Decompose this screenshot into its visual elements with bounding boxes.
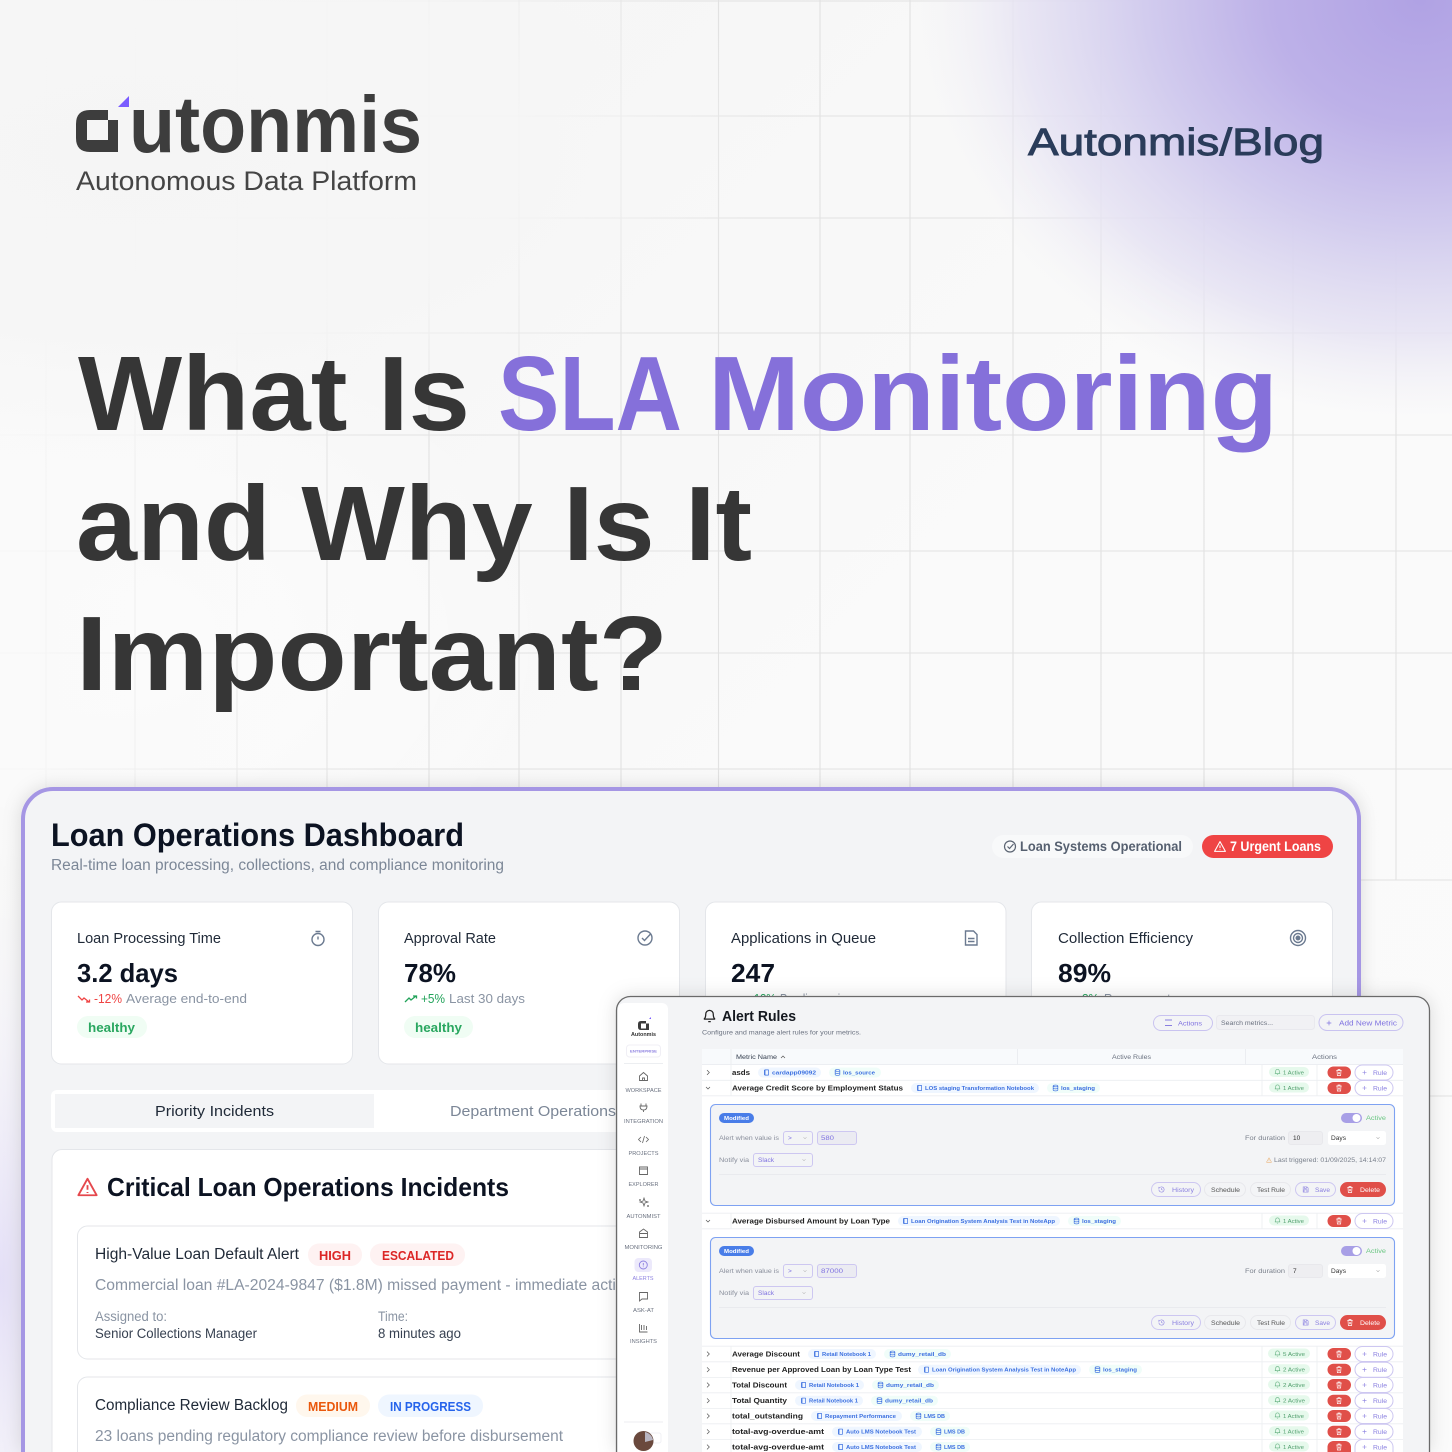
enterprise badge: ENTERPRISE <box>630 1050 658 1054</box>
row: average discount: dumy_retail_db <box>898 1352 947 1358</box>
row: average discount: 5 Active <box>1283 1352 1305 1358</box>
row: revenue per approved loan <box>702 1362 1403 1378</box>
title: Monitoring <box>708 335 1278 453</box>
rule editor: credit score: Active <box>1366 1115 1386 1122</box>
row: total avg overdue amount duplicate: total-avg-overdue-amt <box>732 1442 825 1452</box>
row: total outstanding: 1 Active <box>1283 1414 1304 1420</box>
enterprise badge <box>626 1045 660 1057</box>
rule editor: disbursed amount: Days <box>1331 1268 1347 1275</box>
nav: insights: INSIGHTS <box>630 1339 658 1345</box>
row: total outstanding: Repayment Performance <box>825 1414 896 1420</box>
row: total avg overdue amount: Rule <box>1373 1429 1387 1436</box>
KPI card: loan processing time: Average end-to-end <box>126 991 247 1006</box>
nav: workspace <box>626 1072 662 1094</box>
icon: logo mark <box>76 96 129 152</box>
icon: target <box>1290 930 1306 946</box>
KPI card: collection efficiency: 8% <box>1082 991 1099 1006</box>
nav: integration <box>624 1104 663 1125</box>
incident: high-value loan default: HIGH <box>319 1248 351 1263</box>
row: total avg overdue amount: LMS DB <box>944 1430 965 1436</box>
KPI card: approval rate: Approval Rate <box>404 930 496 947</box>
row: asds: los_source <box>843 1070 875 1076</box>
incident: high-value loan default: Time: <box>378 1309 408 1324</box>
rule editor: credit score: Test Rule <box>1257 1187 1285 1194</box>
nav: ask-at <box>633 1292 655 1314</box>
nav: integration: INTEGRATION <box>624 1119 663 1125</box>
add new metric button <box>1319 1014 1403 1030</box>
incident: compliance review backlog: Compliance Review Backlog <box>95 1397 288 1414</box>
row: revenue per approved loan: los_staging <box>1103 1368 1138 1374</box>
dashboard heading: Loan Operations Dashboard <box>51 817 464 853</box>
search box <box>1216 1016 1314 1030</box>
status pill: systems operational: Loan Systems Operational <box>1020 839 1182 854</box>
row: total discount: Total Discount <box>732 1380 788 1390</box>
nav: insights <box>630 1324 658 1345</box>
row: total quantity: Retail Notebook 1 <box>809 1399 858 1405</box>
row: total avg overdue amount duplicate <box>707 1439 1393 1452</box>
nav: projects <box>628 1136 659 1157</box>
nav: alerts active <box>632 1258 654 1282</box>
rule editor: credit score: Delete <box>1360 1187 1380 1194</box>
nav: projects: PROJECTS <box>628 1151 659 1157</box>
nav: explorer <box>628 1167 659 1188</box>
nav: workspace: WORKSPACE <box>626 1088 662 1094</box>
rule editor: disbursed amount: 87000 <box>821 1268 843 1275</box>
logo: Autonmis <box>76 80 422 196</box>
title: What Is <box>78 335 470 453</box>
KPI card: approval rate: healthy <box>415 1020 463 1035</box>
table header: Active Rules <box>1112 1054 1152 1061</box>
row: total quantity <box>702 1393 1403 1408</box>
rule editor: credit score: For duration <box>1245 1135 1286 1142</box>
nav: alerts active: ALERTS <box>632 1276 654 1282</box>
status pill: urgent loans <box>1202 835 1333 858</box>
nav: autonmist: AUTONMIST <box>626 1214 661 1220</box>
row: total outstanding: Rule <box>1373 1413 1387 1420</box>
status pill: urgent loans: 7 Urgent Loans <box>1230 839 1321 854</box>
rule editor: disbursed amount: > <box>788 1268 792 1275</box>
status pill: systems operational <box>992 835 1193 858</box>
rule editor: credit score: > <box>788 1135 792 1142</box>
row: average disbursed amount: Rule <box>1373 1218 1387 1225</box>
rule editor: disbursed amount: History <box>1172 1320 1195 1327</box>
row: average credit score: Average Credit Score by Employment Status <box>732 1084 903 1092</box>
nav: ask-at: ASK-AT <box>633 1308 655 1314</box>
rule editor: credit score: Notify via <box>719 1157 750 1164</box>
incident: high-value loan default: ESCALATED <box>382 1248 454 1263</box>
row: average disbursed amount <box>702 1213 1403 1229</box>
rule editor: credit score: Days <box>1331 1135 1347 1142</box>
KPI card: collection efficiency: Collection Efficiency <box>1058 930 1194 947</box>
rule editor: credit score: Schedule <box>1211 1187 1240 1194</box>
incident: compliance review backlog: MEDIUM <box>308 1399 358 1414</box>
rule editor: credit score: 580 <box>821 1135 834 1142</box>
table: alert rules <box>702 1049 1403 1452</box>
row: average credit score <box>702 1080 1403 1096</box>
row: total discount <box>702 1377 1403 1393</box>
row: total avg overdue amount duplicate: LMS DB <box>944 1445 965 1451</box>
nav: monitoring: MONITORING <box>624 1245 662 1251</box>
row: total avg overdue amount: 1 Active <box>1283 1429 1304 1435</box>
user avatar <box>634 1431 661 1451</box>
row: total outstanding: total_outstanding <box>732 1412 804 1420</box>
row: asds <box>702 1065 1403 1080</box>
rule editor: credit score: Last triggered: 01/09/2025, 14:14:07 <box>1274 1157 1387 1164</box>
row: total avg overdue amount <box>702 1424 1403 1440</box>
rule editor: disbursed amount: Test Rule <box>1257 1320 1285 1327</box>
KPI card: collection efficiency: Recovery rate <box>1104 991 1177 1006</box>
rule editor: disbursed amount: Schedule <box>1211 1320 1240 1327</box>
row: average credit score: LOS staging Transformation Notebook <box>925 1086 1035 1092</box>
logo wordmark: utonmis <box>129 80 422 169</box>
row: total discount: Retail Notebook 1 <box>809 1383 859 1389</box>
row: total outstanding <box>702 1408 1403 1424</box>
tabs: Department Operations <box>450 1103 616 1120</box>
KPI card: loan processing time: -12% <box>94 991 122 1006</box>
row: asds: 1 Active <box>1283 1070 1304 1076</box>
sidebar logo <box>631 1017 656 1038</box>
rule editor: credit score: Modified <box>724 1116 749 1122</box>
KPI card: loan processing time: Loan Processing Time <box>77 930 221 947</box>
row: total discount: 2 Active <box>1283 1383 1305 1389</box>
KPI card: applications in queue: 18% <box>754 991 776 1006</box>
KPI card: applications in queue: 247 <box>731 958 775 988</box>
incident: high-value loan default: Commercial loan #LA-2024-9847 ($1.8M) missed payment - immediate action required <box>95 1277 695 1294</box>
actions button <box>1154 1016 1212 1030</box>
row: total quantity: Rule <box>1373 1398 1387 1405</box>
KPI card: approval rate: 78% <box>404 958 456 988</box>
row: average credit score: Rule <box>1373 1085 1387 1092</box>
incident: high-value loan default <box>78 1226 1308 1359</box>
rule editor: disbursed amount: For duration <box>1245 1268 1286 1275</box>
row: revenue per approved loan: Loan Origination System Analysis Test in NoteApp <box>932 1368 1077 1374</box>
tabs <box>51 1090 1332 1132</box>
row: average discount: Rule <box>1373 1351 1387 1358</box>
row: average disbursed amount: los_staging <box>1082 1219 1117 1225</box>
rule editor: credit score: 10 <box>1293 1135 1301 1142</box>
panel: critical incidents <box>52 1150 1332 1452</box>
incident: high-value loan default: 8 minutes ago <box>378 1326 461 1341</box>
KPI card: applications in queue: Pending review <box>780 991 855 1006</box>
title <box>76 335 1278 713</box>
sidebar logo: Autonmis <box>631 1032 656 1038</box>
KPI card: approval rate: Last 30 days <box>449 991 526 1006</box>
panel: loan operations dashboard <box>23 789 1359 1452</box>
row: average discount: Retail Notebook 1 <box>822 1352 871 1358</box>
row: total discount: dumy_retail_db <box>886 1383 935 1389</box>
row: revenue per approved loan: 2 Active <box>1283 1367 1305 1373</box>
icon: document <box>966 931 977 945</box>
row: total avg overdue amount: total-avg-overdue-amt <box>732 1427 825 1436</box>
row: total quantity: Total Quantity <box>732 1396 788 1405</box>
incident: high-value loan default: Assigned to: <box>95 1309 167 1324</box>
row: total avg overdue amount duplicate: 1 Active <box>1283 1445 1304 1451</box>
search box: Search metrics... <box>1221 1020 1273 1027</box>
incident: high-value loan default: Senior Collections Manager <box>95 1326 257 1341</box>
row: average disbursed amount: Loan Origination System Analysis Test in NoteApp <box>911 1219 1056 1225</box>
rule editor: credit score: Save <box>1315 1187 1330 1194</box>
incident: high-value loan default: High-Value Loan Default Alert <box>95 1246 300 1263</box>
row: total quantity: 2 Active <box>1283 1398 1305 1404</box>
KPI card: applications in queue: Applications in Queue <box>731 930 876 947</box>
alert rules heading: Alert Rules <box>722 1008 796 1025</box>
table header <box>702 1049 1403 1064</box>
row: total outstanding: LMS DB <box>924 1414 945 1420</box>
KPI card: loan processing time <box>52 902 352 1064</box>
row: total avg overdue amount duplicate: Auto LMS Notebook Test <box>846 1445 916 1451</box>
KPI card: collection efficiency <box>1032 902 1332 1064</box>
icon: check circle <box>638 931 652 945</box>
table header: Actions <box>1312 1054 1338 1061</box>
incident: compliance review backlog <box>78 1377 1308 1452</box>
incident: compliance review backlog: IN PROGRESS <box>390 1399 471 1414</box>
title: SLA <box>498 335 682 453</box>
decorative purple gradient <box>920 0 1452 420</box>
row: average credit score: los_staging <box>1061 1086 1096 1092</box>
title: and Why Is It <box>76 465 752 583</box>
incidents heading: Critical Loan Operations Incidents <box>107 1172 509 1202</box>
icon: stopwatch <box>312 932 324 946</box>
rule editor: disbursed amount: Delete <box>1360 1320 1380 1327</box>
KPI card: applications in queue <box>706 902 1006 1064</box>
panel: alert rules window <box>616 996 1430 1452</box>
add new metric button: Add New Metric <box>1339 1018 1397 1028</box>
nav: autonmist <box>626 1198 661 1220</box>
row: total quantity: dumy_retail_db <box>885 1399 934 1405</box>
row: average disbursed amount: 1 Active <box>1283 1219 1304 1225</box>
KPI card: loan processing time: healthy <box>88 1020 136 1035</box>
row: average disbursed amount: Average Disbursed Amount by Loan Type <box>732 1216 890 1226</box>
nav: monitoring <box>624 1229 662 1251</box>
row: revenue per approved loan: Revenue per Approved Loan by Loan Type Test <box>732 1365 912 1374</box>
rule editor: disbursed amount: Modified <box>724 1249 749 1255</box>
rule editor: credit score: History <box>1172 1187 1195 1194</box>
dashboard subtitle: Real-time loan processing, collections, and compliance monitoring <box>51 857 504 874</box>
alert rules subtitle: Configure and manage alert rules for your metrics. <box>702 1030 861 1036</box>
row: average discount <box>702 1346 1403 1362</box>
row: average credit score: 1 Active <box>1283 1086 1304 1092</box>
rule editor: disbursed amount: Slack <box>758 1290 775 1297</box>
rule editor: disbursed amount <box>710 1238 1394 1338</box>
icon: warning triangle <box>78 1179 97 1195</box>
rule editor: credit score: Slack <box>758 1157 775 1164</box>
row: average discount: Average Discount <box>732 1350 801 1358</box>
rule editor: disbursed amount: 7 <box>1293 1268 1297 1275</box>
table header: Metric Name <box>736 1054 777 1061</box>
KPI card: approval rate <box>378 902 680 1064</box>
row: asds: asds <box>732 1068 750 1077</box>
actions button: Actions <box>1178 1020 1203 1028</box>
blog label: Autonmis/Blog <box>1028 122 1324 164</box>
rule editor: credit score: Alert when value is <box>719 1135 779 1142</box>
rule editor: disbursed amount: Save <box>1315 1320 1330 1327</box>
tabs: Priority Incidents <box>155 1103 274 1120</box>
rule editor: disbursed amount: Alert when value is <box>719 1268 779 1275</box>
row: revenue per approved loan: Rule <box>1373 1367 1387 1374</box>
row: total avg overdue amount duplicate: Rule <box>1373 1444 1387 1451</box>
row: total discount: Rule <box>1373 1382 1387 1389</box>
nav: explorer: EXPLORER <box>628 1182 659 1188</box>
sidebar <box>618 1003 668 1452</box>
icon: bell <box>704 1010 715 1022</box>
KPI card: collection efficiency: 89% <box>1058 958 1111 988</box>
title: Important? <box>76 595 668 713</box>
rule editor: disbursed amount: Notify via <box>719 1290 750 1297</box>
KPI card: loan processing time: 3.2 days <box>77 958 178 988</box>
rule editor: disbursed amount: Active <box>1366 1248 1386 1255</box>
rule editor: credit score <box>710 1104 1394 1206</box>
row: total avg overdue amount: Auto LMS Notebook Test <box>846 1430 916 1436</box>
row: asds: Rule <box>1373 1070 1387 1077</box>
tagline: Autonomous Data Platform <box>76 166 417 196</box>
KPI card: approval rate: +5% <box>421 991 445 1006</box>
incident: compliance review backlog: 23 loans pending regulatory compliance review before disbursement <box>95 1428 564 1445</box>
row: asds: cardapp09092 <box>772 1070 816 1076</box>
